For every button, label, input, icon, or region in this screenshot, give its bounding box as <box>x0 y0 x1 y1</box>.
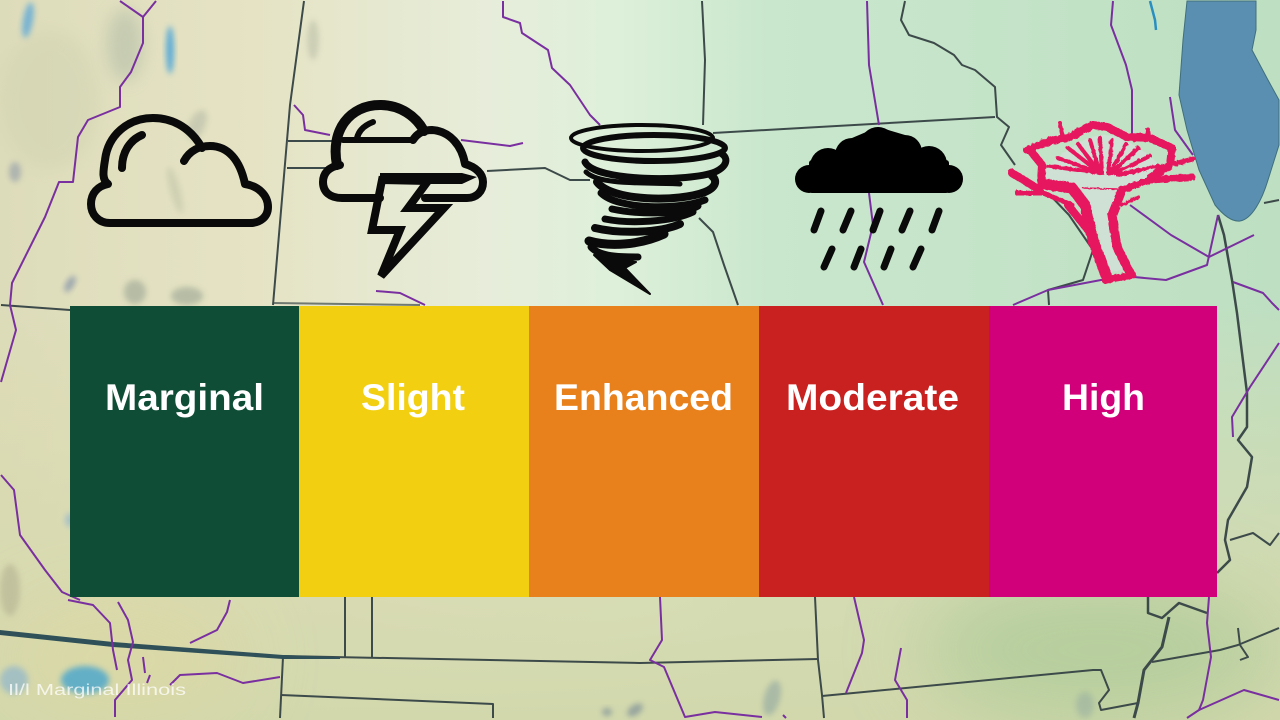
panel: moderate: Moderate <box>786 377 959 418</box>
panel: high: High <box>1062 377 1145 418</box>
panel: marginal <box>70 306 299 597</box>
panel: slight: Slight <box>361 377 465 418</box>
panel: enhanced: Enhanced <box>554 377 733 418</box>
icon: tornado (enhanced) <box>571 125 726 294</box>
icon: storm cloud with lightning (slight) <box>323 105 483 276</box>
thick border line <box>0 630 340 659</box>
blue stream <box>1150 1 1156 30</box>
garbled watermark text: Il/l Marginal Illinois <box>8 682 186 699</box>
panel: moderate <box>759 306 989 597</box>
panel: high <box>989 306 1217 597</box>
panel: enhanced <box>529 306 759 597</box>
icon: cloud (marginal) <box>91 118 268 223</box>
panel: marginal: Marginal <box>105 377 264 418</box>
lake <box>1179 1 1279 221</box>
risk scale bar <box>70 306 1217 597</box>
icon: rain cloud (moderate) <box>795 127 963 267</box>
icon: mushroom explosion (high) <box>1012 123 1193 280</box>
panel: slight <box>299 306 529 597</box>
